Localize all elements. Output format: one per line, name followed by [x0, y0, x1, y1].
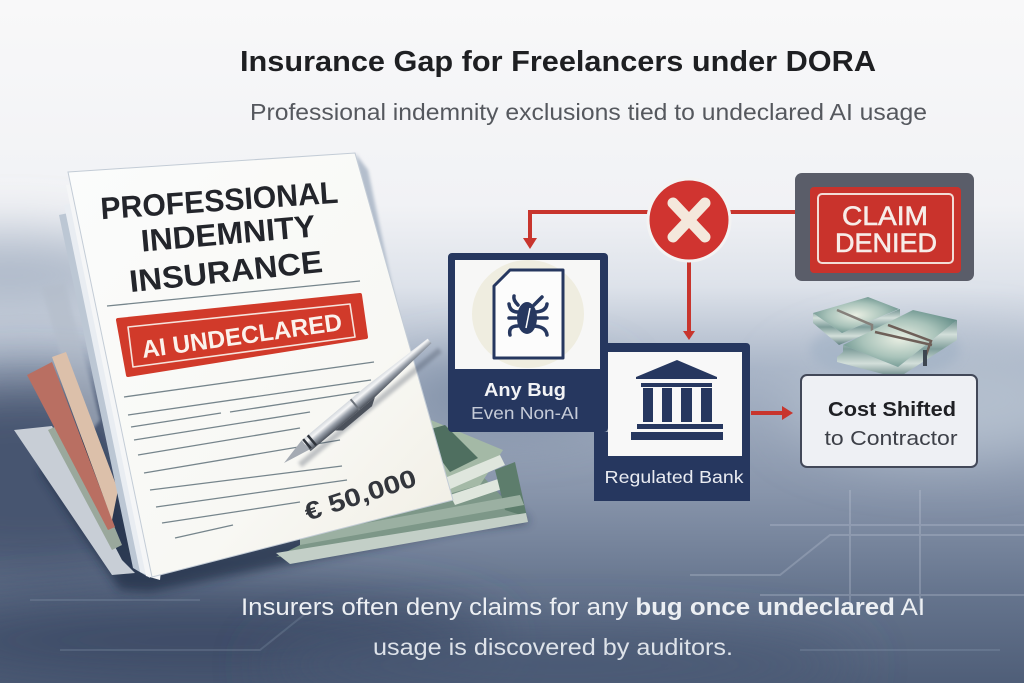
caption [241, 594, 925, 660]
document lines [107, 281, 374, 538]
icon: pen [280, 336, 440, 473]
document heading [99, 175, 339, 299]
arrow: to regulated bank [683, 260, 695, 340]
sheet shadow top right [355, 153, 395, 300]
arrow: to any bug [523, 212, 648, 249]
connector arrows [523, 212, 796, 420]
subtitle: Professional indemnity exclusions tied to undeclared AI usage [250, 99, 927, 125]
document heading: INSURANCE [128, 244, 324, 299]
label: any bug: Any Bug [484, 379, 566, 400]
arrow: to cost shifted [751, 406, 793, 420]
illustration: insurance document with cash [14, 153, 530, 592]
front sheet [68, 153, 453, 577]
label: even non-AI: Even Non-AI [471, 403, 579, 423]
cash: banknotes lower right [276, 413, 528, 564]
stamp: AI undeclared: AI UNDECLARED [140, 309, 344, 364]
caption: Insurers often deny claims for any bug once undeclared AI [241, 594, 925, 621]
shadow beneath document [40, 430, 530, 592]
icon: red X [648, 179, 730, 261]
panel: claim denied [795, 173, 974, 281]
panel: claim denied: DENIED [835, 228, 937, 258]
icon: bug file [472, 260, 584, 368]
panel: cost shifted [801, 375, 977, 467]
panel: claim denied: CLAIM [842, 201, 928, 231]
panel: cost shifted: to Contractor [824, 427, 958, 450]
panel: cost shifted: Cost Shifted [828, 399, 956, 421]
title: Insurance Gap for Freelancers under DORA [240, 46, 876, 78]
label: regulated bank: Regulated Bank [604, 467, 744, 487]
stamp: AI undeclared [118, 295, 366, 375]
document heading: PROFESSIONAL [99, 175, 339, 226]
caption: usage is discovered by auditors. [373, 634, 733, 660]
cash: papers on left side [14, 283, 135, 575]
icon: bank [631, 360, 723, 440]
back sheets [59, 200, 150, 578]
panel: any bug [448, 253, 608, 432]
panel: regulated bank [594, 343, 750, 501]
document heading: INDEMNITY [139, 208, 317, 259]
arrow: to claim denied [730, 210, 796, 214]
icon: cash stacks [810, 297, 960, 378]
amount: € 50,000 [301, 464, 420, 527]
